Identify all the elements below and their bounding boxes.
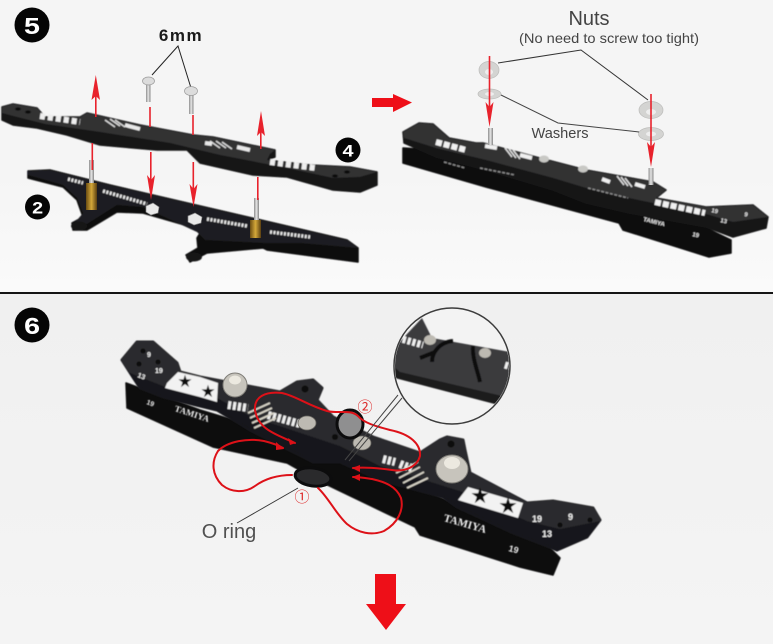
arrow: continue down xyxy=(366,574,406,630)
lower plate, large view xyxy=(126,383,560,575)
hex nuts in lower plate xyxy=(146,203,202,225)
part text on plates: 19 xyxy=(155,368,163,375)
panel: step 5 screw assembly xyxy=(2,8,377,262)
badge: part 2: 2 xyxy=(32,200,43,219)
step markers: ② xyxy=(357,396,373,417)
assembled plate number and brand text xyxy=(643,208,749,240)
routing arrowheads xyxy=(276,438,360,481)
upper plate, large view xyxy=(122,342,600,556)
callout: magnified detail xyxy=(345,308,515,461)
badge: step 6: 6 xyxy=(23,314,41,341)
stars: ★ xyxy=(177,372,193,392)
label: 6mm: 6mm xyxy=(159,26,203,45)
note: no need to screw too tight: (No need to screw too tight) xyxy=(519,30,699,46)
assembled plate number and brand text: 19 xyxy=(711,208,719,216)
white star panels xyxy=(165,372,523,518)
brass standoffs and screws xyxy=(86,160,261,238)
assembled plate markings and springs xyxy=(436,142,705,213)
step markers: ① xyxy=(294,486,310,507)
stars xyxy=(177,372,518,519)
assembled plates xyxy=(403,123,768,257)
assembled plate number and brand text: 19 xyxy=(692,232,700,240)
stars: ★ xyxy=(470,484,490,509)
stars: ★ xyxy=(200,382,216,402)
panel: step 6 O ring routing xyxy=(14,308,600,575)
leader lines: nuts xyxy=(498,50,648,100)
washer holes xyxy=(485,69,656,136)
part text on plates: 9 xyxy=(568,512,573,522)
part text on plates: 13 xyxy=(136,372,146,382)
upper plate markings and springs xyxy=(40,116,315,168)
part text on plates: 13 xyxy=(542,529,552,539)
O rings xyxy=(294,410,363,488)
lower plate xyxy=(28,170,358,262)
screws xyxy=(142,77,198,114)
badge: step 5 xyxy=(14,8,50,42)
upper plate xyxy=(2,104,377,192)
lower plate markings xyxy=(68,179,310,237)
badge: step 5: 5 xyxy=(23,14,41,41)
callout: O ring xyxy=(202,488,298,543)
red arrows: nuts and washers xyxy=(486,56,655,167)
assembled plate number and brand text: 9 xyxy=(744,212,749,219)
assembled plate number and brand text: TAMIYA xyxy=(643,217,666,228)
red arrows: step 5 xyxy=(92,75,265,207)
exposed screws xyxy=(488,128,654,185)
arrow: to next stage xyxy=(372,94,412,112)
leader lines: washers xyxy=(501,95,639,132)
badge: step 6 xyxy=(14,308,50,342)
panel: nuts and washers xyxy=(403,8,768,257)
white printed stripes xyxy=(228,405,412,468)
divider between steps xyxy=(0,292,773,294)
flange nuts xyxy=(223,373,468,483)
mounting holes xyxy=(136,348,592,528)
coil springs xyxy=(248,403,428,488)
assembled plate number and brand text: 13 xyxy=(720,218,728,226)
stars: ★ xyxy=(498,494,518,519)
badge: part 2 xyxy=(25,194,50,220)
part text on plates: 19 xyxy=(532,514,542,524)
part text on plates: 9 xyxy=(147,352,151,359)
part text on plates: TAMIYA xyxy=(173,403,211,424)
badge: part 4 xyxy=(336,138,360,162)
part text on plates: 19 xyxy=(145,399,155,409)
badge: part 4: 4 xyxy=(342,143,354,162)
step markers xyxy=(294,396,373,507)
leader lines: 6mm xyxy=(152,46,191,88)
callout: O ring: O ring xyxy=(202,521,256,543)
small screws xyxy=(298,416,371,450)
label: Nuts: Nuts xyxy=(568,8,610,30)
label: Washers: Washers xyxy=(532,125,588,142)
part text on plates: 19 xyxy=(507,543,520,556)
nuts and washers exploded xyxy=(478,62,664,140)
red routing curves xyxy=(213,393,420,533)
part text on plates: TAMIYA xyxy=(442,512,488,536)
part text on plates xyxy=(136,352,573,556)
